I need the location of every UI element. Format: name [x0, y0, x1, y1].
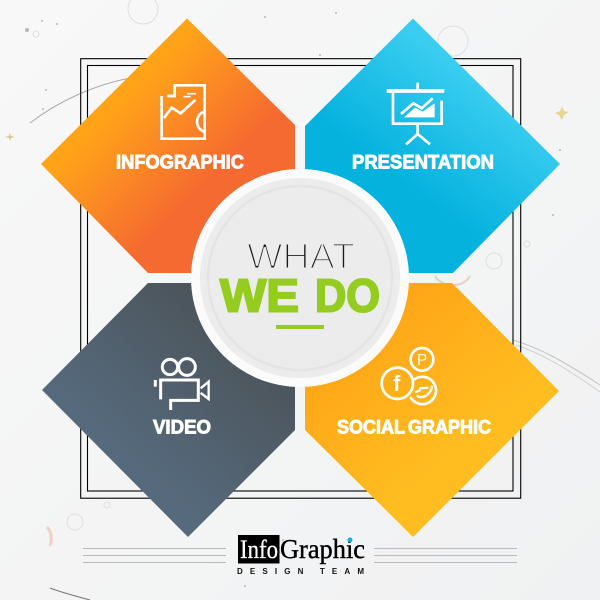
label: presentation: PRESENTATION	[352, 152, 494, 174]
green underline	[276, 325, 324, 329]
center circle	[191, 169, 409, 387]
icon: social media circles	[382, 348, 436, 404]
heading: we do: WE	[220, 270, 299, 322]
panel: video	[42, 283, 295, 537]
logo: DESIGN TEAM	[237, 567, 364, 576]
logo	[237, 534, 365, 576]
label: social graphic: SOCIAL	[337, 417, 405, 439]
icon: social media circles: P	[417, 352, 427, 369]
icon: infographic chart sheet	[162, 85, 205, 139]
panel: presentation	[305, 18, 560, 273]
double line frame	[81, 59, 521, 498]
icon: social media circles: f	[393, 371, 401, 396]
heading: what: WHAT	[247, 236, 355, 276]
label: infographic: INFOGRAPHIC	[116, 152, 244, 174]
panel: social graphic	[305, 283, 559, 537]
panel: infographic	[41, 18, 295, 273]
label: video: VIDEO	[153, 417, 211, 439]
heading: we do: DO	[315, 270, 380, 322]
logo: Graphic	[280, 534, 365, 564]
label: social graphic	[337, 417, 491, 439]
label: social graphic: GRAPHIC	[408, 417, 491, 439]
logo: Info	[240, 535, 278, 564]
logo side lines	[83, 548, 517, 562]
icon: presentation board	[387, 83, 444, 144]
heading: we do	[220, 270, 380, 322]
icon: film camera	[155, 359, 209, 410]
